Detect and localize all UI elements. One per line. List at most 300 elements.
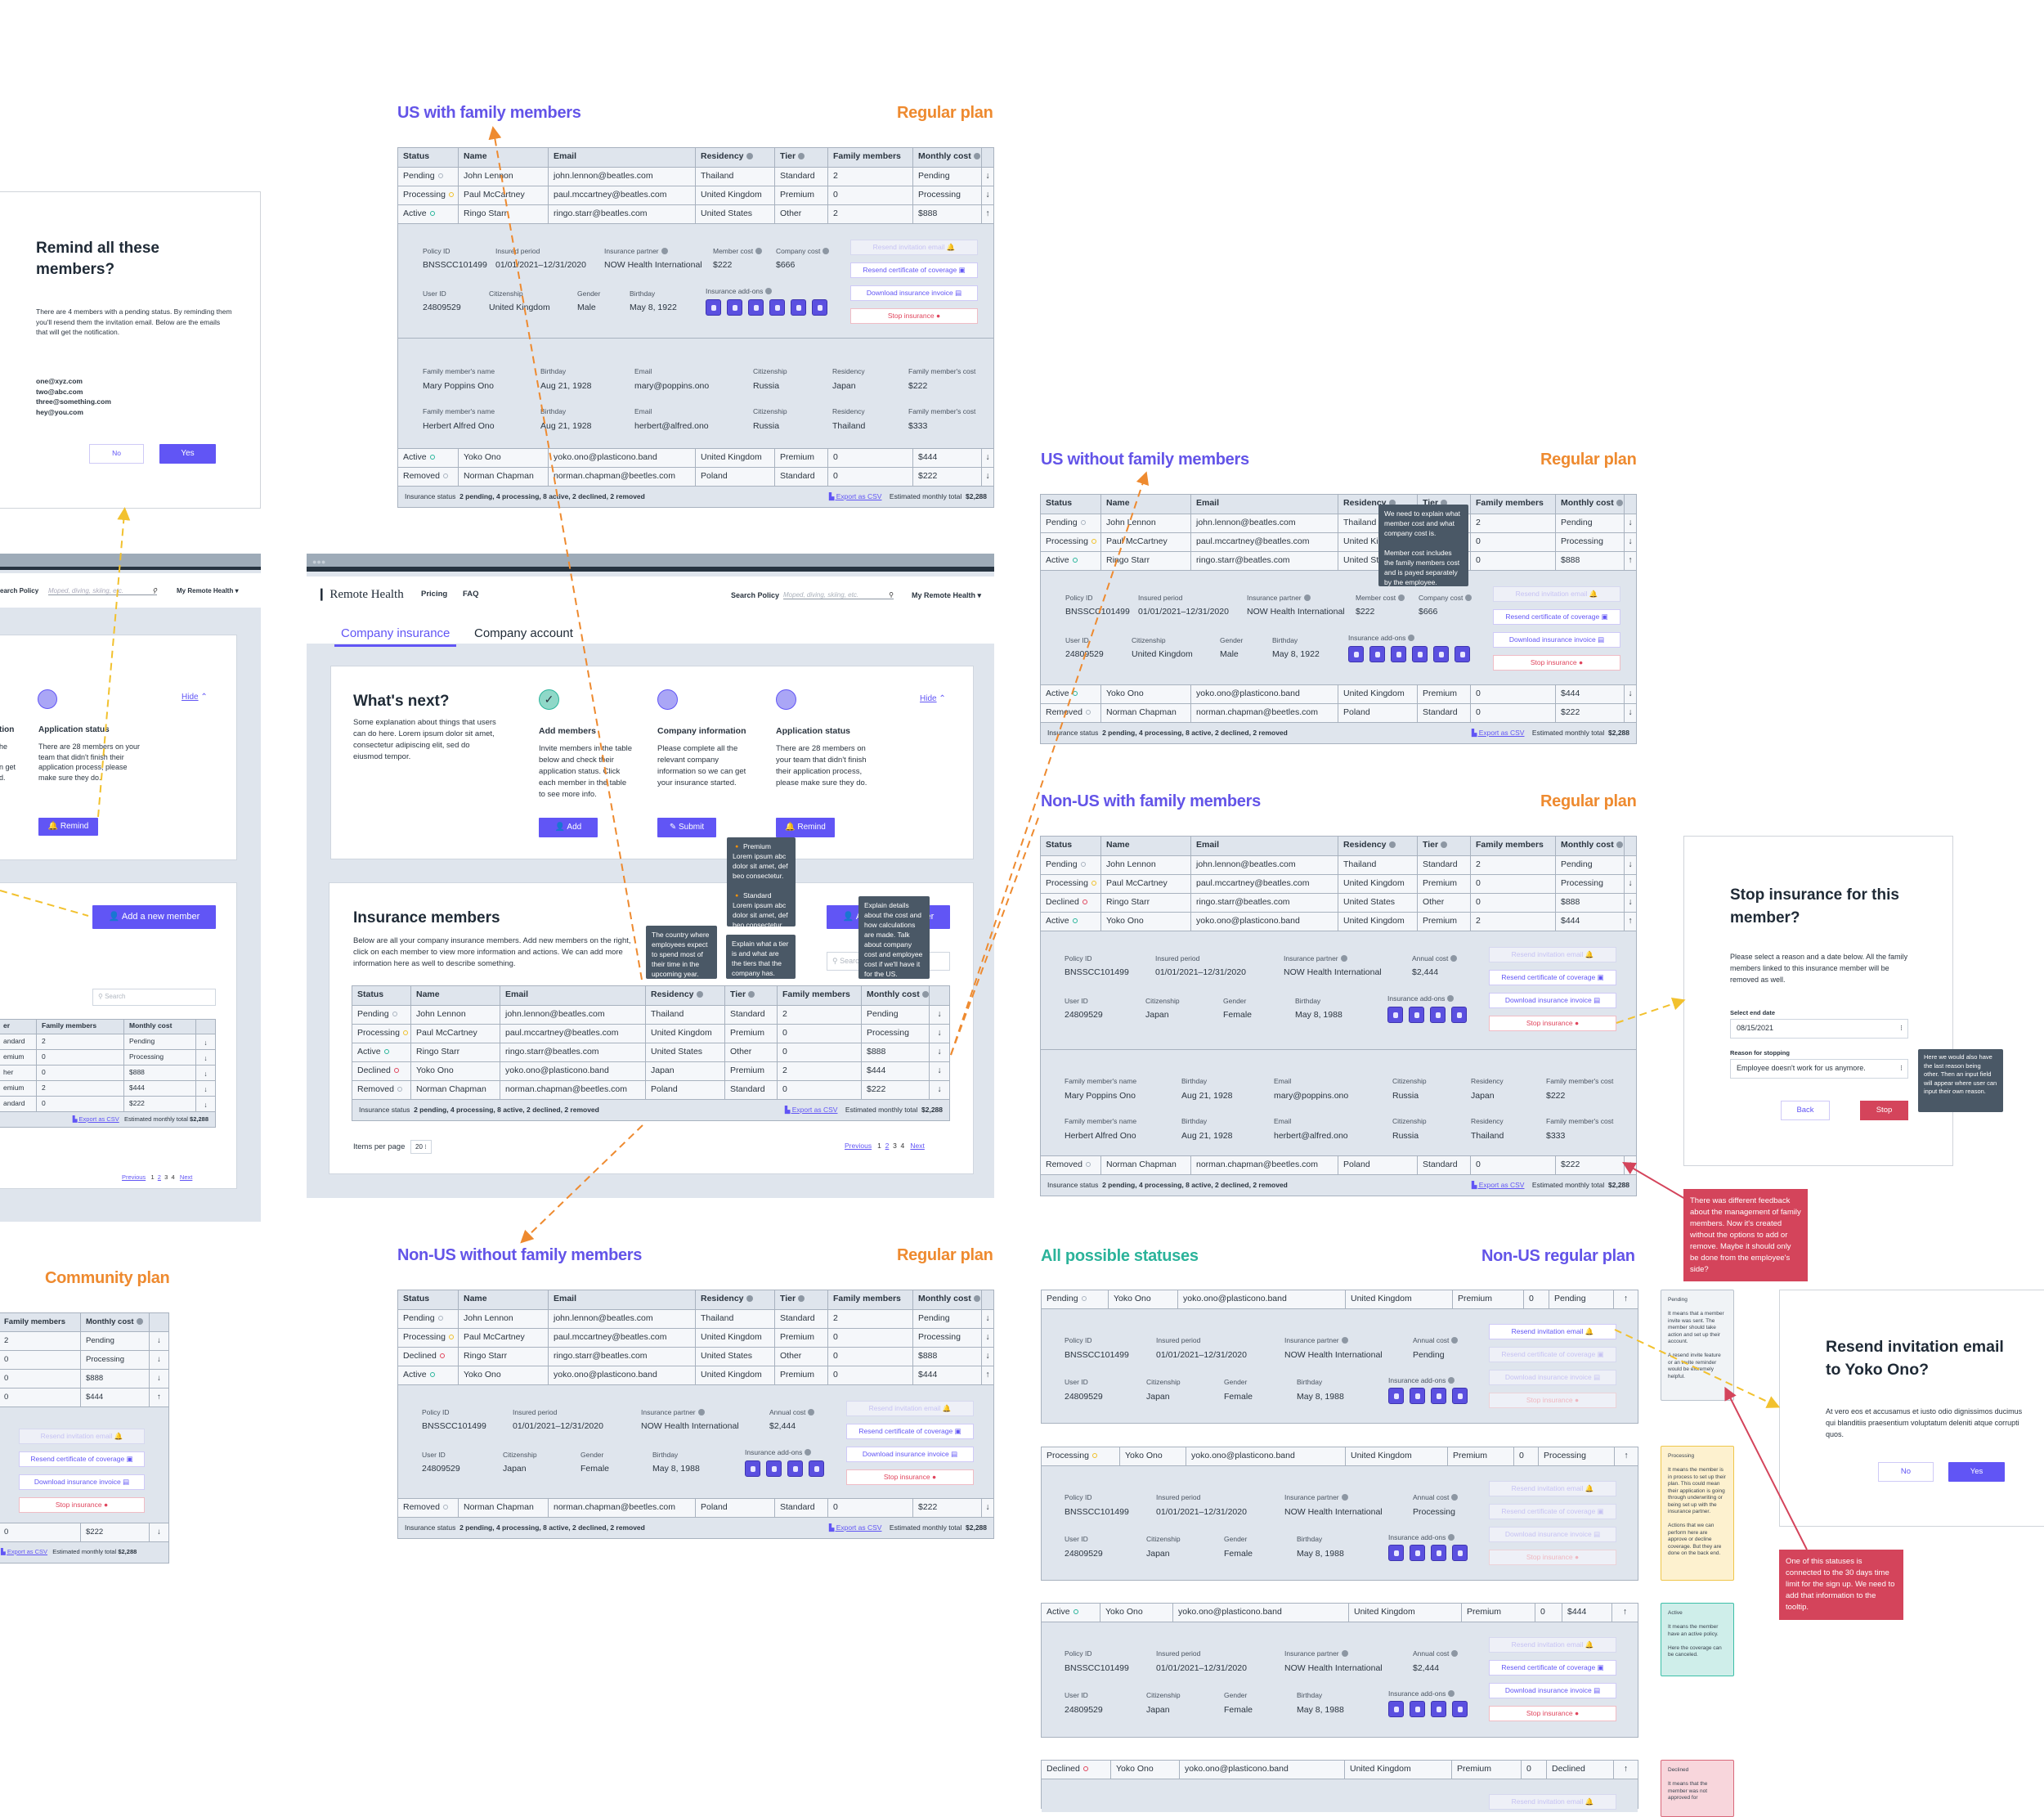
detail panel: User ID: [1065, 636, 1089, 644]
header row: Name: [1106, 498, 1130, 508]
detail panel: Company cost: [776, 247, 820, 255]
table: US without family members: Removed: [1046, 707, 1083, 717]
members table: paul.mccartney@beatles.com: [505, 1028, 618, 1038]
nav bar: ⚲: [889, 591, 894, 599]
status panel: processing: May 8, 1988: [1297, 1549, 1344, 1559]
table: Non-US with family members: john.lennon@beatles.com: [1196, 859, 1296, 869]
note: declined status: It means that the member was not approved for: [1668, 1781, 1707, 1801]
status panel: active: $2,444: [1413, 1663, 1439, 1673]
family members section: herbert@alfred.ono: [634, 421, 709, 431]
detail panel: Annual cost: [769, 1408, 805, 1416]
table: US without family members: United States: [1343, 555, 1395, 565]
card: members (cropped): andard: [3, 1037, 25, 1045]
table: Non-US without family members: Processing: [403, 1332, 446, 1342]
table: US without family members: Pending: [1046, 518, 1078, 527]
members table: Premium: [730, 1066, 764, 1075]
card: members (cropped): 👤 Add a new member: [109, 912, 199, 922]
family members section: Aug 21, 1928: [1181, 1091, 1232, 1101]
row: processing: paul.mccartney@beatles.com: [554, 190, 666, 200]
status panel: active: Annual cost: [1413, 1649, 1449, 1658]
modal: stop insurance: member?: [1730, 909, 1800, 926]
table: Non-US with family members: Other: [1423, 897, 1444, 907]
card: members (cropped): Processing: [129, 1052, 164, 1061]
status panel: processing: Japan: [1146, 1549, 1170, 1559]
tooltip: tier premium/standard: [727, 837, 796, 926]
header row: Status: [403, 151, 429, 161]
row: pending: John Lennon: [464, 171, 513, 181]
row: pending: Pending: [403, 171, 435, 181]
status panel: declined (cropped): Resend invitation email 🔔: [1512, 1797, 1594, 1806]
row: active Yoko: ↓: [985, 452, 990, 462]
table: US without family members: Premium: [1423, 536, 1457, 546]
detail panel: Resend invitation email 🔔: [1512, 950, 1594, 958]
row: processing: 0: [833, 190, 838, 200]
step: application status: 🔔 Remind: [785, 823, 826, 832]
members table: Residency: [651, 989, 694, 999]
row: pending: 2: [833, 171, 838, 181]
detail panel: Insurance partner: [1284, 954, 1338, 962]
header row: Tier: [1423, 498, 1438, 508]
detail panel: Policy ID: [423, 247, 450, 255]
table: Non-US with family members: $888: [1561, 897, 1580, 907]
step: company information: [657, 689, 746, 837]
family members section: Residency: [1471, 1077, 1504, 1085]
table: Non-US with family members: United Kingdom: [1343, 916, 1405, 926]
table: US with family members: [397, 147, 994, 508]
row: active: United States: [701, 209, 752, 218]
detail panel: Birthday: [630, 289, 655, 298]
members table: [352, 985, 950, 1121]
table: Non-US without family members: 2: [833, 1313, 838, 1323]
detail panel: Download insurance invoice ▤: [1509, 635, 1604, 644]
row: active: [398, 205, 993, 224]
table: community plan (cropped): [0, 1312, 169, 1564]
status panel: pending: Birthday: [1297, 1378, 1322, 1386]
family members section: Citizenship: [1392, 1117, 1427, 1125]
modal: stop insurance: Please select a reason and a date below. All the family members linked to this insurance member will be removed as well.: [1730, 953, 1907, 984]
row: removed: Removed: [403, 471, 440, 481]
detail panel: User ID: [422, 1451, 446, 1459]
table: Non-US with family members: Monthly cost: [1561, 840, 1614, 850]
detail panel: Member cost: [713, 247, 753, 255]
row: active Yoko: United Kingdom: [701, 452, 762, 462]
status panel: active: yoko.ono@plasticono.band: [1178, 1607, 1282, 1617]
status panel: active: ↑: [1623, 1607, 1627, 1617]
table: Non-US with family members: Family members: [1476, 840, 1544, 850]
tooltip: tier explain: Explain what a tier is and what are the tiers that the company has.: [732, 940, 788, 977]
card: application status: 🔔 Remind: [48, 822, 88, 831]
table: Non-US without family members: Premium: [780, 1332, 814, 1342]
modal heading: members?: [36, 261, 114, 278]
table: Non-US without family members: Pending: [403, 1313, 435, 1323]
table: US without family members: Poland: [1343, 707, 1370, 717]
table: community plan (cropped): Pending: [86, 1336, 114, 1345]
table: Non-US with family members: 2: [1476, 859, 1481, 869]
table: Non-US with family members: Paul McCartney: [1106, 878, 1168, 888]
detail panel: Gender: [1220, 636, 1243, 644]
table: US without family members: Active: [1046, 555, 1069, 565]
family members section: Herbert Alfred Ono: [423, 421, 495, 431]
status panel: active: Insured period: [1156, 1649, 1200, 1658]
note: active status: Here the coverage can be canceled.: [1668, 1645, 1722, 1658]
table: Non-US without family members: ↓: [985, 1351, 990, 1361]
table: Non-US without family members: $222: [918, 1502, 937, 1512]
table: US without family members: john.lennon@beatles.com: [1196, 518, 1296, 527]
nav bar: ❙ Remote Health: [316, 588, 404, 601]
status panel: active: Active: [1047, 1607, 1070, 1617]
table: US without family members: Standard: [1423, 707, 1458, 717]
row: removed: 0: [833, 471, 838, 481]
table: Non-US with family members: ↓: [1628, 878, 1633, 888]
card: members (cropped): 2: [42, 1083, 46, 1092]
detail panel: 24809529: [1065, 649, 1104, 659]
table: Non-US with family members: 0: [1476, 1160, 1481, 1169]
table: Non-US with family members: Standard: [1423, 1160, 1458, 1169]
status panel: pending: Citizenship: [1146, 1378, 1181, 1386]
top bar: [0, 554, 261, 570]
header row: Tier: [780, 151, 796, 161]
modal: resend invitation email: Yes: [1970, 1467, 1983, 1476]
table: Non-US with family members: paul.mccartney@beatles.com: [1196, 878, 1309, 888]
status panel: pending: Yoko Ono: [1114, 1294, 1151, 1303]
family members section: Citizenship: [753, 367, 787, 375]
table: Non-US without family members: 0: [833, 1502, 838, 1512]
nav bar: [307, 577, 994, 644]
nav bar: earch Policy: [0, 587, 38, 594]
status panel: declined (cropped): United Kingdom: [1350, 1764, 1411, 1774]
detail panel: NOW Health International: [1247, 607, 1345, 617]
left app screenshot (cropped): [0, 554, 261, 1222]
card: members (cropped): emium: [3, 1052, 25, 1061]
status panel: pending: [1041, 1290, 1638, 1424]
modal: stop insurance: ⁝: [1900, 1024, 1903, 1032]
table: Non-US with family members: Processing: [1561, 878, 1603, 888]
detail panel: Birthday: [652, 1451, 678, 1459]
table: community plan (cropped): ▙ Export as CSV Estimated monthly total $2,288: [1, 1548, 137, 1555]
family members section: Japan: [1471, 1091, 1495, 1101]
status panel: active: BNSSCC101499: [1065, 1663, 1129, 1673]
card: members (cropped): $888: [129, 1068, 145, 1076]
status panel: processing: Policy ID: [1065, 1493, 1092, 1501]
row: removed: Norman Chapman: [464, 471, 534, 481]
members table: $888: [867, 1047, 885, 1057]
row: removed: Standard: [780, 471, 815, 481]
status panel: active: 01/01/2021–12/31/2020: [1156, 1663, 1247, 1673]
email list: one@xyz.com: [36, 377, 83, 385]
members table: Premium: [730, 1028, 764, 1038]
members table: Tier: [730, 989, 746, 999]
note: declined status: [1661, 1760, 1734, 1817]
row: pending: Thailand: [701, 171, 733, 181]
detail panel: Insured period: [1138, 594, 1182, 602]
title: Non-US without family members: Non-US without family members: [397, 1246, 642, 1264]
members table: $444: [867, 1066, 885, 1075]
tooltip: member cost explanation: We need to explain what member cost and what company cost is.: [1384, 509, 1460, 537]
table: Non-US with family members: [1040, 836, 1637, 1196]
status panel: processing: Birthday: [1297, 1535, 1322, 1543]
status panel: pending: Pending: [1047, 1294, 1078, 1303]
members table: $222: [867, 1084, 885, 1094]
status panel: processing: 0: [1519, 1451, 1524, 1460]
family members section: Russia: [1392, 1131, 1419, 1141]
members table: Japan: [651, 1066, 675, 1075]
family members section: Family member's name: [423, 367, 495, 375]
family members section: Family member's cost: [908, 367, 975, 375]
row: removed: ↓: [985, 471, 990, 481]
status panel: processing: Gender: [1224, 1535, 1247, 1543]
table: Non-US without family members: Removed: [403, 1502, 440, 1512]
row: active Yoko: [398, 449, 993, 468]
modal: resend invitation email: At vero eos et accusamus et iusto odio dignissimos ducimus qui blanditiis praesentium voluptatum deleniti atque corrupti quos.: [1826, 1407, 2022, 1438]
table: Non-US with family members: Pending: [1046, 859, 1078, 869]
table: Non-US without family members: john.lennon@beatles.com: [554, 1313, 653, 1323]
table: Non-US with family members: Norman Chapman: [1106, 1160, 1177, 1169]
status panel: active: Insurance add-ons: [1388, 1689, 1446, 1698]
table: Non-US with family members: Yoko Ono: [1106, 916, 1144, 926]
detail panel: 01/01/2021–12/31/2020: [1155, 967, 1246, 977]
members table: Name: [416, 989, 440, 999]
nav bar: Search Policy: [731, 591, 779, 599]
table: Non-US without family members: Thailand: [701, 1313, 733, 1323]
members table: Processing: [357, 1028, 400, 1038]
table: Non-US with family members: United States: [1343, 897, 1395, 907]
card: insurance members: Below are all your company insurance members. Add new members on the right, click on each member to view more information and actions. We can add more information here as well to describe something.: [353, 936, 631, 968]
tooltip: reason other: Here we would also have the last reason being other. Then an input field will appear where user can input their own reason.: [1924, 1053, 1997, 1095]
detail panel: Birthday: [1295, 997, 1320, 1005]
status panel: processing: Premium: [1453, 1451, 1487, 1460]
table: Non-US with family members: ↓: [1628, 897, 1633, 907]
table: Non-US without family members: Family members: [833, 1294, 901, 1303]
family members section: Family member's name: [1065, 1077, 1136, 1085]
row: active: Ringo Starr: [464, 209, 507, 218]
tabs: Company insurance: [341, 626, 450, 640]
card: members (cropped): ⚲ Search: [98, 993, 125, 1000]
email list: hey@you.com: [36, 407, 83, 415]
status panel: processing: 24809529: [1065, 1549, 1103, 1559]
note: processing status: [1661, 1446, 1734, 1581]
table: community plan (cropped): Stop insurance ●: [56, 1501, 108, 1509]
title: US with family members: US with family members: [397, 104, 581, 122]
detail panel: Female: [580, 1464, 609, 1474]
table: Non-US without family members: 0: [833, 1370, 838, 1380]
detail panel: Policy ID: [1065, 954, 1092, 962]
email list: [36, 377, 111, 415]
card: what's next: What's next?: [353, 693, 449, 710]
table: Non-US with family members: yoko.ono@plasticono.band: [1196, 916, 1300, 926]
row: processing: Paul McCartney: [464, 190, 525, 200]
header row: Monthly cost: [918, 151, 971, 161]
nav bar: FAQ: [463, 590, 479, 599]
family members section: Japan: [832, 381, 856, 391]
card: members (cropped): $444: [129, 1083, 145, 1092]
table: US without family members: Insurance status 2 pending, 4 processing, 8 active, 2 declined, 2 removed: [1047, 729, 1288, 737]
card: application status: Application status: [38, 725, 110, 734]
table: Non-US without family members: norman.chapman@beetles.com: [554, 1502, 675, 1512]
detail panel: BNSSCC101499: [422, 1421, 486, 1431]
card: members (cropped): Pending: [129, 1037, 155, 1045]
modal: stop insurance: Reason for stopping: [1730, 1049, 1790, 1057]
table: Non-US with family members: 0: [1476, 897, 1481, 907]
table: community plan (cropped): Monthly cost: [86, 1317, 134, 1326]
table: Non-US without family members: Status: [403, 1294, 429, 1303]
detail panel: Resend invitation email 🔔: [873, 243, 955, 251]
tooltip: tier premium/standard: 🔸 Standard: [733, 891, 771, 900]
status panel: pending: Insurance partner: [1284, 1336, 1339, 1344]
detail panel: 01/01/2021–12/31/2020: [1138, 607, 1229, 617]
table: Non-US without family members: paul.mccartney@beatles.com: [554, 1332, 666, 1342]
status panel: processing: Annual cost: [1413, 1493, 1449, 1501]
step: application status: Application status: [776, 726, 850, 736]
detail panel: Insurance add-ons: [1348, 634, 1405, 642]
note: pending status: A resend invite feature or an invite reminder would be extremely helpful.: [1668, 1353, 1721, 1379]
status panel: pending: NOW Health International: [1284, 1350, 1383, 1360]
browser top bar: ●●●: [312, 558, 325, 566]
status panel: processing: yoko.ono@plasticono.band: [1191, 1451, 1295, 1460]
table: US without family members: ringo.starr@beatles.com: [1196, 555, 1290, 565]
family members section: [1041, 1050, 1636, 1156]
detail panel: Resend certificate of coverage ▣: [858, 1427, 961, 1435]
step: application status: There are 28 members on your team that didn't finish their application process, please make sure they do.: [776, 744, 867, 787]
header row: [398, 148, 993, 168]
detail panel: Resend certificate of coverage ▣: [1501, 973, 1604, 981]
title: Community plan: Community plan: [45, 1269, 169, 1287]
table: community plan (cropped): Download insurance invoice ▤: [34, 1478, 129, 1486]
family members section: mary@poppins.ono: [1274, 1091, 1348, 1101]
row: active: $888: [918, 209, 937, 218]
detail panel: 24809529: [422, 1464, 460, 1474]
family members section: $333: [1546, 1131, 1565, 1141]
tooltip: member cost explanation: [1378, 505, 1468, 586]
table: Non-US with family members: ↓: [1628, 859, 1633, 869]
detail panel: May 8, 1922: [630, 303, 677, 312]
card: members (cropped): ↓: [204, 1039, 208, 1047]
plan label: regular plan (non-US with family): Regular plan: [1540, 792, 1637, 810]
table: US without family members: Thailand: [1343, 518, 1376, 527]
row: active: Active: [403, 209, 427, 218]
detail panel: Download insurance invoice ▤: [1505, 996, 1600, 1004]
table: Non-US with family members: norman.chapman@beetles.com: [1196, 1160, 1318, 1169]
table: US without family members: Standard: [1423, 518, 1458, 527]
detail panel: Stop insurance ●: [1531, 658, 1583, 666]
members table: Poland: [651, 1084, 678, 1094]
step: add members: Add members: [539, 726, 596, 736]
detail panel: Resend certificate of coverage ▣: [863, 266, 966, 274]
status panel: active: Resend certificate of coverage ▣: [1501, 1663, 1604, 1671]
table: community plan (cropped): $888: [86, 1374, 103, 1383]
status panel: active: Download insurance invoice ▤: [1505, 1686, 1600, 1694]
status panel: pending: Resend invitation email 🔔: [1512, 1327, 1594, 1335]
status panel: pending: Insured period: [1156, 1336, 1200, 1344]
table: Non-US without family members: United Kingdom: [701, 1370, 762, 1380]
table: Non-US without family members: Residency: [701, 1294, 744, 1303]
status panel: processing: User ID: [1065, 1535, 1088, 1543]
arrow: to add a new member: [0, 891, 88, 916]
table: Non-US with family members: Active: [1046, 916, 1069, 926]
detail panel: $222: [713, 260, 732, 270]
table: US without family members: ↑: [1628, 555, 1633, 565]
note: active status: [1661, 1603, 1734, 1676]
card: insurance members: Previous 1 2 3 4 Next: [845, 1142, 925, 1150]
button: no: No: [112, 449, 121, 457]
status panel: active: Insurance partner: [1284, 1649, 1339, 1658]
table: US without family members: Processing: [1046, 536, 1088, 546]
status panel: pending: ↑: [1624, 1294, 1628, 1303]
table: US without family members: ↓: [1628, 536, 1633, 546]
table: Non-US without family members: United Kingdom: [701, 1332, 762, 1342]
members table: Paul McCartney: [416, 1028, 477, 1038]
title: All possible statuses: All possible statuses: [1041, 1247, 1199, 1265]
table: Non-US with family members: Ringo Starr: [1106, 897, 1150, 907]
members table: ↓: [937, 1028, 942, 1038]
detail panel: Insurance partner: [641, 1408, 696, 1416]
tabs: [334, 626, 456, 647]
table: Non-US with family members: Processing: [1046, 878, 1088, 888]
status panel: processing: [1041, 1447, 1638, 1581]
note: active status: Active: [1668, 1610, 1683, 1616]
header row: [1041, 495, 1636, 514]
table: Non-US with family members: Insurance status 2 pending, 4 processing, 8 active, 2 declined, 2 removed: [1047, 1181, 1288, 1189]
table: Non-US with family members: ringo.starr@beatles.com: [1196, 897, 1290, 907]
header row: Name: [464, 151, 487, 161]
card: members (cropped): Monthly cost: [129, 1021, 172, 1030]
card: members (cropped): Previous 1 2 3 4 Next: [122, 1173, 192, 1181]
status panel: pending: Resend certificate of coverage ▣: [1501, 1350, 1604, 1358]
table: US without family members: Norman Chapman: [1106, 707, 1177, 717]
card: application status: [0, 635, 237, 860]
members table: Processing: [867, 1028, 909, 1038]
table: Non-US with family members: Pending: [1561, 859, 1593, 869]
status panel: pending: May 8, 1988: [1297, 1392, 1344, 1402]
note: active status: It means the member have an active policy.: [1668, 1624, 1719, 1637]
status panel: pending: yoko.ono@plasticono.band: [1183, 1294, 1287, 1303]
card: members (cropped): Family members: [42, 1021, 96, 1030]
table: Non-US with family members: United Kingdom: [1343, 878, 1405, 888]
detail panel: Male: [1220, 649, 1239, 659]
family members section: Thailand: [832, 421, 865, 431]
members table: Other: [730, 1047, 751, 1057]
detail panel: Citizenship: [1132, 636, 1166, 644]
arrow: feedback callout to removed row: [1628, 1165, 1685, 1199]
row: active Yoko: Yoko Ono: [464, 452, 501, 462]
status panel: active: Japan: [1146, 1705, 1170, 1715]
table: Non-US with family members: Status: [1046, 840, 1072, 850]
table: US without family members: ▙ Export as CSV Estimated monthly total $2,288: [1472, 729, 1629, 737]
detail panel: Gender: [1223, 997, 1246, 1005]
tooltip: reason other: [1918, 1049, 2003, 1112]
table: Non-US with family members: John Lennon: [1106, 859, 1156, 869]
nav bar: Moped, diving, skiing, etc.: [783, 591, 858, 599]
table: Non-US with family members: Premium: [1423, 916, 1457, 926]
family members section: Residency: [832, 407, 865, 415]
step: add members: 👤 Add: [555, 823, 581, 832]
table: Non-US with family members: Name: [1106, 840, 1130, 850]
detail panel: Member cost: [1356, 594, 1396, 602]
detail panel: Gender: [580, 1451, 603, 1459]
note: pending status: It means that a member invite was sent. The member should take action and set up their account.: [1668, 1311, 1724, 1344]
status panel: processing: Yoko Ono: [1125, 1451, 1163, 1460]
status panel: declined (cropped): Yoko Ono: [1116, 1764, 1154, 1774]
row: processing: [398, 186, 993, 205]
family members section: $333: [908, 421, 927, 431]
table: Non-US without family members: Standard: [780, 1313, 815, 1323]
table: Non-US with family members: ↓: [1628, 1160, 1633, 1169]
plan label: regular plan (US with family): Regular plan: [897, 104, 993, 122]
table: Non-US with family members: Tier: [1423, 840, 1438, 850]
detail panel: User ID: [1065, 997, 1088, 1005]
members table: United Kingdom: [651, 1028, 712, 1038]
nav notch: [630, 577, 666, 586]
header row: Monthly cost: [1561, 498, 1614, 508]
